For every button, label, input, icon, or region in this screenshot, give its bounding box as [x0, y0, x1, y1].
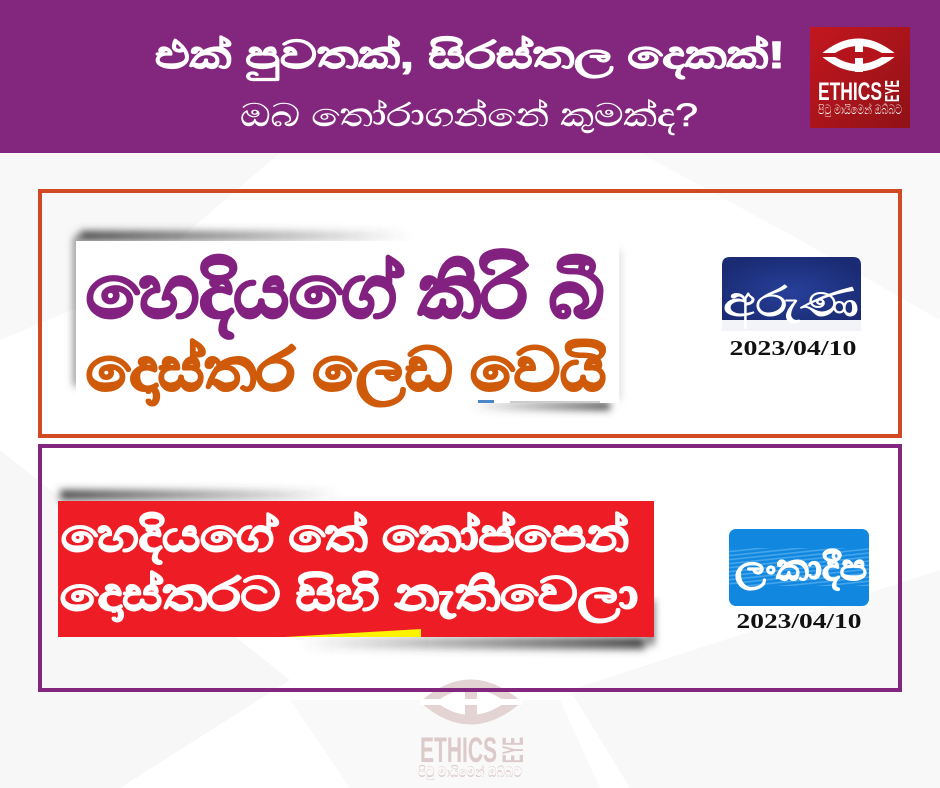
watermark logo: EYE [497, 737, 530, 763]
headline line 2: දොස්තර ලෙඩ වෙයි [86, 336, 606, 407]
headline card shadow [74, 231, 620, 410]
watermark logo [418, 680, 530, 781]
newspaper logo: Aruna [722, 257, 861, 331]
headline card [76, 241, 619, 407]
headline line 1: හෙදියගේ තේ කෝප්පෙන් [61, 509, 629, 565]
logo: Ethics Eye header [810, 27, 910, 128]
newspaper logo: Aruna: අරුණ [723, 278, 859, 329]
date: Lankadeepa: 2023/04/10 [736, 609, 862, 633]
newspaper logo: Lankadeepa: ලංකාදීප [735, 547, 867, 591]
logo: Ethics Eye header: ETHICS [818, 78, 882, 106]
headline line 2: දොස්තරට සිහි නැතිවෙලා [60, 568, 638, 623]
newspaper logo: Lankadeepa [729, 529, 869, 606]
logo: Ethics Eye header: EYE [882, 80, 904, 102]
logo: Ethics Eye header: පිටු මායිමෙන් ඔබ්බට [818, 102, 902, 117]
date: Aruna: 2023/04/10 [730, 336, 856, 360]
watermark logo: ETHICS [420, 731, 497, 770]
header band [0, 0, 940, 153]
watermark logo: පිටු මායිමෙන් ඔබ්බට [418, 763, 522, 781]
title: එක් පුවතක්, සිරස්තල දෙකක්! [155, 34, 785, 81]
headline card [58, 501, 654, 637]
panel: second headline [40, 446, 900, 690]
headline card shadow [60, 490, 654, 649]
panel: first headline [40, 191, 900, 436]
subtitle: ඔබ තෝරාගන්නේ කුමක්ද? [240, 97, 698, 135]
headline line 1: හෙදියගේ කිරි බී [86, 248, 604, 339]
